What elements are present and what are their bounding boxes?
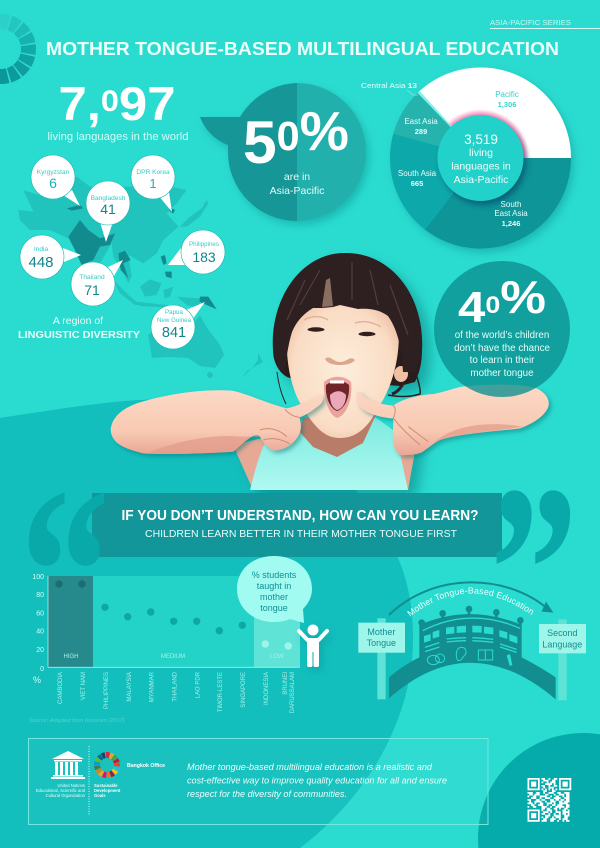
callout: Philippines: 183 [192,249,216,265]
callout: DPR Korea [131,155,175,212]
chart: donut of languages by region: Asia-Pacific [454,174,508,186]
divider [88,746,90,816]
mouth [324,377,351,418]
country labels: TIMOR-LESTE [218,672,224,712]
callout: Thailand: Thailand [79,274,105,281]
chart: % students taught in mother tongue [32,574,300,713]
arrow: over the bridge [389,582,548,615]
callout: Kyrgyzstan: 6 [49,175,57,191]
callout: Thailand [71,260,123,306]
logo text: SDG: Goals [94,793,106,798]
y axis labels: 0 [40,666,44,673]
segment: South East Asia [425,158,571,249]
chart: donut of languages by region: living [469,147,493,159]
label: Central Asia: Central Asia 13 [361,81,417,90]
nose [325,357,355,365]
callout: % students taught in mother tongue: tongue [260,603,288,613]
callout: India [20,235,81,279]
label: East Asia [404,117,438,136]
quote marks [20,435,578,707]
panel: 50% in Asia-Pacific: 5 [243,109,277,176]
country labels: LAO PDR [196,671,202,698]
statement [187,762,447,800]
country labels: PHILIPPINES [104,672,110,709]
y axis labels: 100 [32,574,44,581]
map caption: A region of [53,315,103,327]
segment: South Asia [390,134,480,230]
icon: book [478,650,493,660]
office label: Bangkok Office [127,763,165,769]
country labels: SINGAPORE [241,672,247,708]
data points [55,580,292,650]
callout: Kyrgyzstan: Kyrgyzstan [37,169,70,176]
left arm [111,390,323,454]
QR code [528,779,570,821]
country labels: BRUNEI [283,672,289,695]
logo: SDG wheel [93,751,121,779]
panel: 50% in Asia-Pacific: are in [284,171,310,183]
callout: Philippines [168,230,225,274]
bands labels [64,654,284,660]
y axis labels: 20 [36,647,44,654]
label: Central Asia [361,81,418,95]
segment: East Asia [393,93,480,158]
country labels: DARUSSALAM [290,672,296,713]
right ear [394,366,408,382]
donut centre [438,115,524,201]
callout: DPR Korea: 1 [149,176,157,191]
bands labels: LOW [270,654,284,660]
y axis labels: 80 [36,592,44,599]
stat: 7,097 living languages [48,77,188,143]
series label [490,18,600,29]
face [287,301,399,438]
source note: Source: Adapted from Kosonen (2017) [29,718,125,724]
label: South East Asia: 1,246 [502,219,520,228]
country labels: THAILAND [172,671,178,702]
banner heading: IF YOU DON’T UNDERSTAND, HOW CAN YOU LEARN? [122,508,479,524]
callout: DPR Korea: DPR Korea [136,169,170,176]
label: South Asia: 665 [411,179,423,188]
y axis labels [32,574,44,673]
country labels: MALAYSIA [127,672,133,702]
callout: Bangladesh [86,181,130,242]
label: Pacific: 1,306 [498,100,516,109]
arm undersides [147,435,260,454]
map: Asia-Pacific [18,177,263,378]
banner subheading: CHILDREN LEARN BETTER IN THEIR MOTHER TONGUE FIRST [145,528,458,540]
logo text: SDG [94,783,121,798]
callout: Papua New Guinea: 841 [162,325,186,341]
photo: child pointing at her mouth [111,253,549,490]
panel: 40% of children: of the world’s children [455,330,549,341]
stat: 7,097 living languages: living languages in the world [48,131,188,143]
label: South East Asia [494,200,528,228]
country labels: VIET NAM [81,672,87,700]
country labels [58,671,296,713]
label: Pacific [495,90,519,109]
segment: Central Asia [418,91,480,158]
diagram: bridge to second language [358,582,586,700]
icon: ear [456,647,466,661]
statement: respect for the diversity of communities. [187,789,347,800]
sign: Mother Tongue: Tongue [367,638,396,648]
panel: 40% of children [434,261,570,397]
label: Pacific: Pacific [495,90,519,99]
callout: India: India [34,246,48,253]
panel: 50% in Asia-Pacific [200,83,366,221]
sign: Mother Tongue: Mother [367,627,395,637]
shoulders [233,420,416,490]
sign: Mother Tongue post [377,618,386,699]
callout: India: 448 [28,254,54,271]
hair bangs [273,253,422,372]
neck [300,410,378,457]
panel: 40% of children: don’t have the chance [454,343,550,354]
label: South Asia [398,169,437,188]
background shape: large darker circle [0,400,413,848]
icon: speech bubbles [427,654,445,665]
sign: Second Language: Second [547,628,578,638]
logo text: UNESCO: United Nations [58,783,85,788]
loose hair strands [277,368,420,404]
chart: donut of languages by region: languages in [451,160,511,172]
segment: Pacific [420,67,571,158]
title: MOTHER TONGUE-BASED MULTILINGUAL EDUCATION [46,38,559,59]
map caption: LINGUISTIC DIVERSITY [18,329,140,341]
sign: Second Language: Language [542,639,582,649]
panel: 40% of children: to learn in their [470,355,535,366]
bands labels: MEDIUM [161,654,185,660]
callout: Papua New Guinea: Papua [165,309,183,316]
label: South East Asia: East Asia [494,209,528,218]
callout: Thailand: 71 [84,282,100,298]
right arm [357,385,549,455]
logo text: UNESCO: Cultural Organization [46,793,86,798]
y unit: % [33,675,41,685]
eyes and brows [304,317,381,336]
chart: donut of languages by region [361,67,571,249]
logo text: UNESCO: Educational, Scientific and [36,788,86,793]
icon: SDG ring [0,10,40,88]
country labels: CAMBODIA [58,672,64,704]
callout: Philippines: Philippines [189,241,219,248]
y axis labels: 40 [36,628,44,636]
panel: 40% of children: 4 [458,283,486,332]
logo text: UNESCO [36,783,86,798]
statement: Mother tongue-based multilingual education is a realistic and [187,762,433,773]
logo text: SDG: Sustainable [94,783,118,788]
sign: Mother Tongue [358,623,405,653]
arrow label: Mother Tongue-Based Education [407,588,534,616]
callout: Bangladesh: 41 [100,201,116,217]
quote marks: “ [20,437,110,707]
shirt [250,417,408,490]
logo: UNESCO temple [51,751,85,779]
panel: 40% of children: % [500,271,541,323]
map caption [18,315,140,341]
chart: donut of languages by region: 3,519 [464,132,498,147]
hair parting [322,278,333,307]
callout: Papua New Guinea: New Guinea [157,317,192,324]
stat: 7,097 living languages: 0 [101,85,119,118]
callout: % students taught in mother tongue [237,556,312,623]
stat: 7,097 living languages: 97 [119,77,176,130]
bands labels: HIGH [64,654,78,660]
panel: 50% in Asia-Pacific: % [300,100,349,162]
callout: Papua New Guinea [151,302,205,349]
label: South Asia: South Asia [398,169,437,178]
sign: Second Language post [558,619,567,700]
panel: 40% of children: 0 [485,292,500,319]
bridge [389,606,556,699]
callout: Kyrgyzstan [31,155,80,206]
arms and hands [111,385,549,455]
icon: child figure [299,624,327,667]
label: South East Asia: South [501,200,521,209]
statement: cost-effective way to improve quality education for all and ensure [187,776,447,786]
icon: pencil [507,654,512,666]
country labels: MYANMAR [150,671,156,702]
panel: 50% in Asia-Pacific: Asia-Pacific [270,185,324,197]
banner: quote bar [20,435,578,707]
callout: Bangladesh: Bangladesh [91,195,126,202]
logo text: SDG: Development [94,788,121,793]
background shape: bottom right circle [478,733,600,848]
panel: footer [28,738,488,824]
hair highlights [287,262,408,335]
label: East Asia: East Asia [404,117,438,126]
finger creases [260,406,428,445]
sign: Second Language [539,624,586,653]
y axis labels: 60 [36,610,44,618]
country labels: INDONESIA [264,672,270,705]
callout: % students taught in mother tongue: taught in [257,581,291,591]
stat: 7,097 living languages: 7, [58,77,98,130]
panel: 40% of children: mother tongue [470,368,534,379]
label: East Asia: 289 [415,127,427,136]
hair back [273,253,422,386]
callout: % students taught in mother tongue: % students [252,570,297,580]
callout: % students taught in mother tongue: mother [260,592,288,602]
panel: 50% in Asia-Pacific: 0 [277,113,300,159]
series label: ASIA-PACIFIC SERIES [490,18,571,27]
